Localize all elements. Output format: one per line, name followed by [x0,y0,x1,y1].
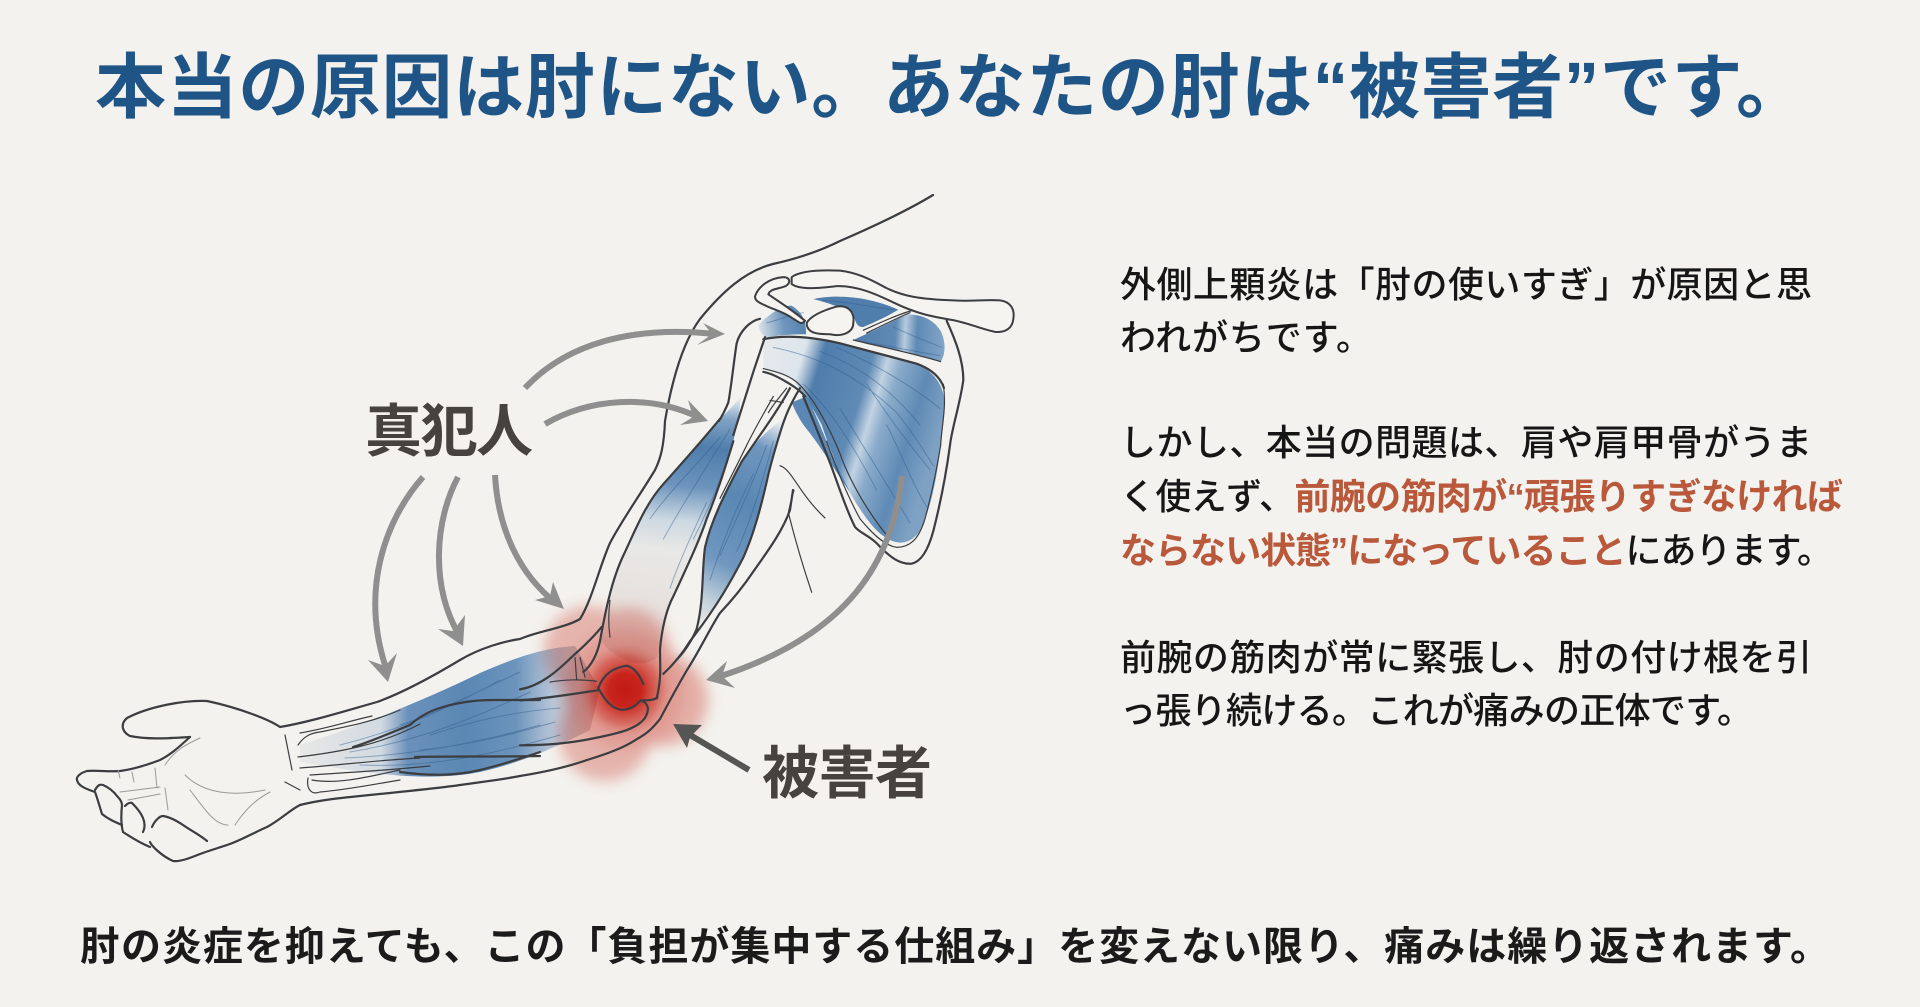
title: 本当の原因は肘にない。あなたの肘は“被害者”です。 [95,49,1807,128]
paragraph 2: く使えず、前腕の筋肉が“頑張りすぎなければ [1120,476,1843,517]
paragraph 2 [1120,422,1843,571]
paragraph 3 [1120,637,1812,731]
label: 真犯人: 真犯人 [365,400,533,464]
arrow: culprit to shoulder [525,323,725,388]
long biceps outline [583,419,720,672]
bottom conclusion: 肘の炎症を抑えても、この「負担が集中する仕組み」を変えない限り、痛みは繰り返されます。 [80,925,1830,969]
inflammation: red elbow glow [544,606,708,781]
forearm muscle dividers [353,700,540,757]
hand [77,737,300,861]
arrow: culprit to elbow [495,475,564,609]
muscle: deltoid fragment [758,306,806,337]
spine of scapula strut [863,311,912,333]
arm contour [123,195,933,738]
paragraph 1: われがちです。 [1120,317,1372,358]
wrist tendons [285,710,430,793]
muscle: long biceps [600,396,741,663]
coracoid [807,306,854,335]
short biceps outline [663,388,800,674]
arrow: culprit to forearm outer [368,477,423,682]
arrow: culprit to upper arm [545,400,708,425]
lower arm contour [300,490,793,805]
humerus head [719,319,760,421]
paragraph 1 [1120,264,1812,358]
armpit folds [780,466,825,518]
paragraph 3: っ張り続ける。これが痛みの正体です。 [1120,690,1753,731]
text block: explanation [1120,264,1843,731]
paragraph 2: しかし、本当の問題は、肩や肩甲骨がうま [1120,422,1812,463]
muscle: scapular back group [763,337,944,543]
scapula outline [803,321,963,564]
muscle: upper strip [813,297,898,327]
elbow joint [598,666,643,688]
paragraph 2: ならない状態”になっていることにあります。 [1120,530,1833,571]
label: 被害者: 被害者 [762,742,932,806]
scapula inner line [827,384,944,547]
muscle fibres [650,300,942,588]
arrow: culprit to forearm mid [438,477,465,646]
paragraph 3: 前腕の筋肉が常に緊張し、肘の付け根を引 [1120,637,1812,678]
illustration: arm and shoulder anatomy [77,195,1014,861]
shoulder and upper arm muscles [600,297,945,663]
muscle: teres minor [792,396,850,492]
acromion [755,277,805,323]
paragraph 1: 外側上顆炎は「肘の使いすぎ」が原因と思 [1120,264,1812,305]
upper arm line work [520,270,1014,745]
arrow: scapula to elbow [706,476,902,688]
muscle: short biceps [697,419,783,627]
muscle: supraspinatus [853,315,945,362]
muscle outlines [763,337,944,388]
clavicle [792,270,1014,332]
arrow: victim to elbow [673,724,749,770]
forearm muscles [300,646,600,777]
